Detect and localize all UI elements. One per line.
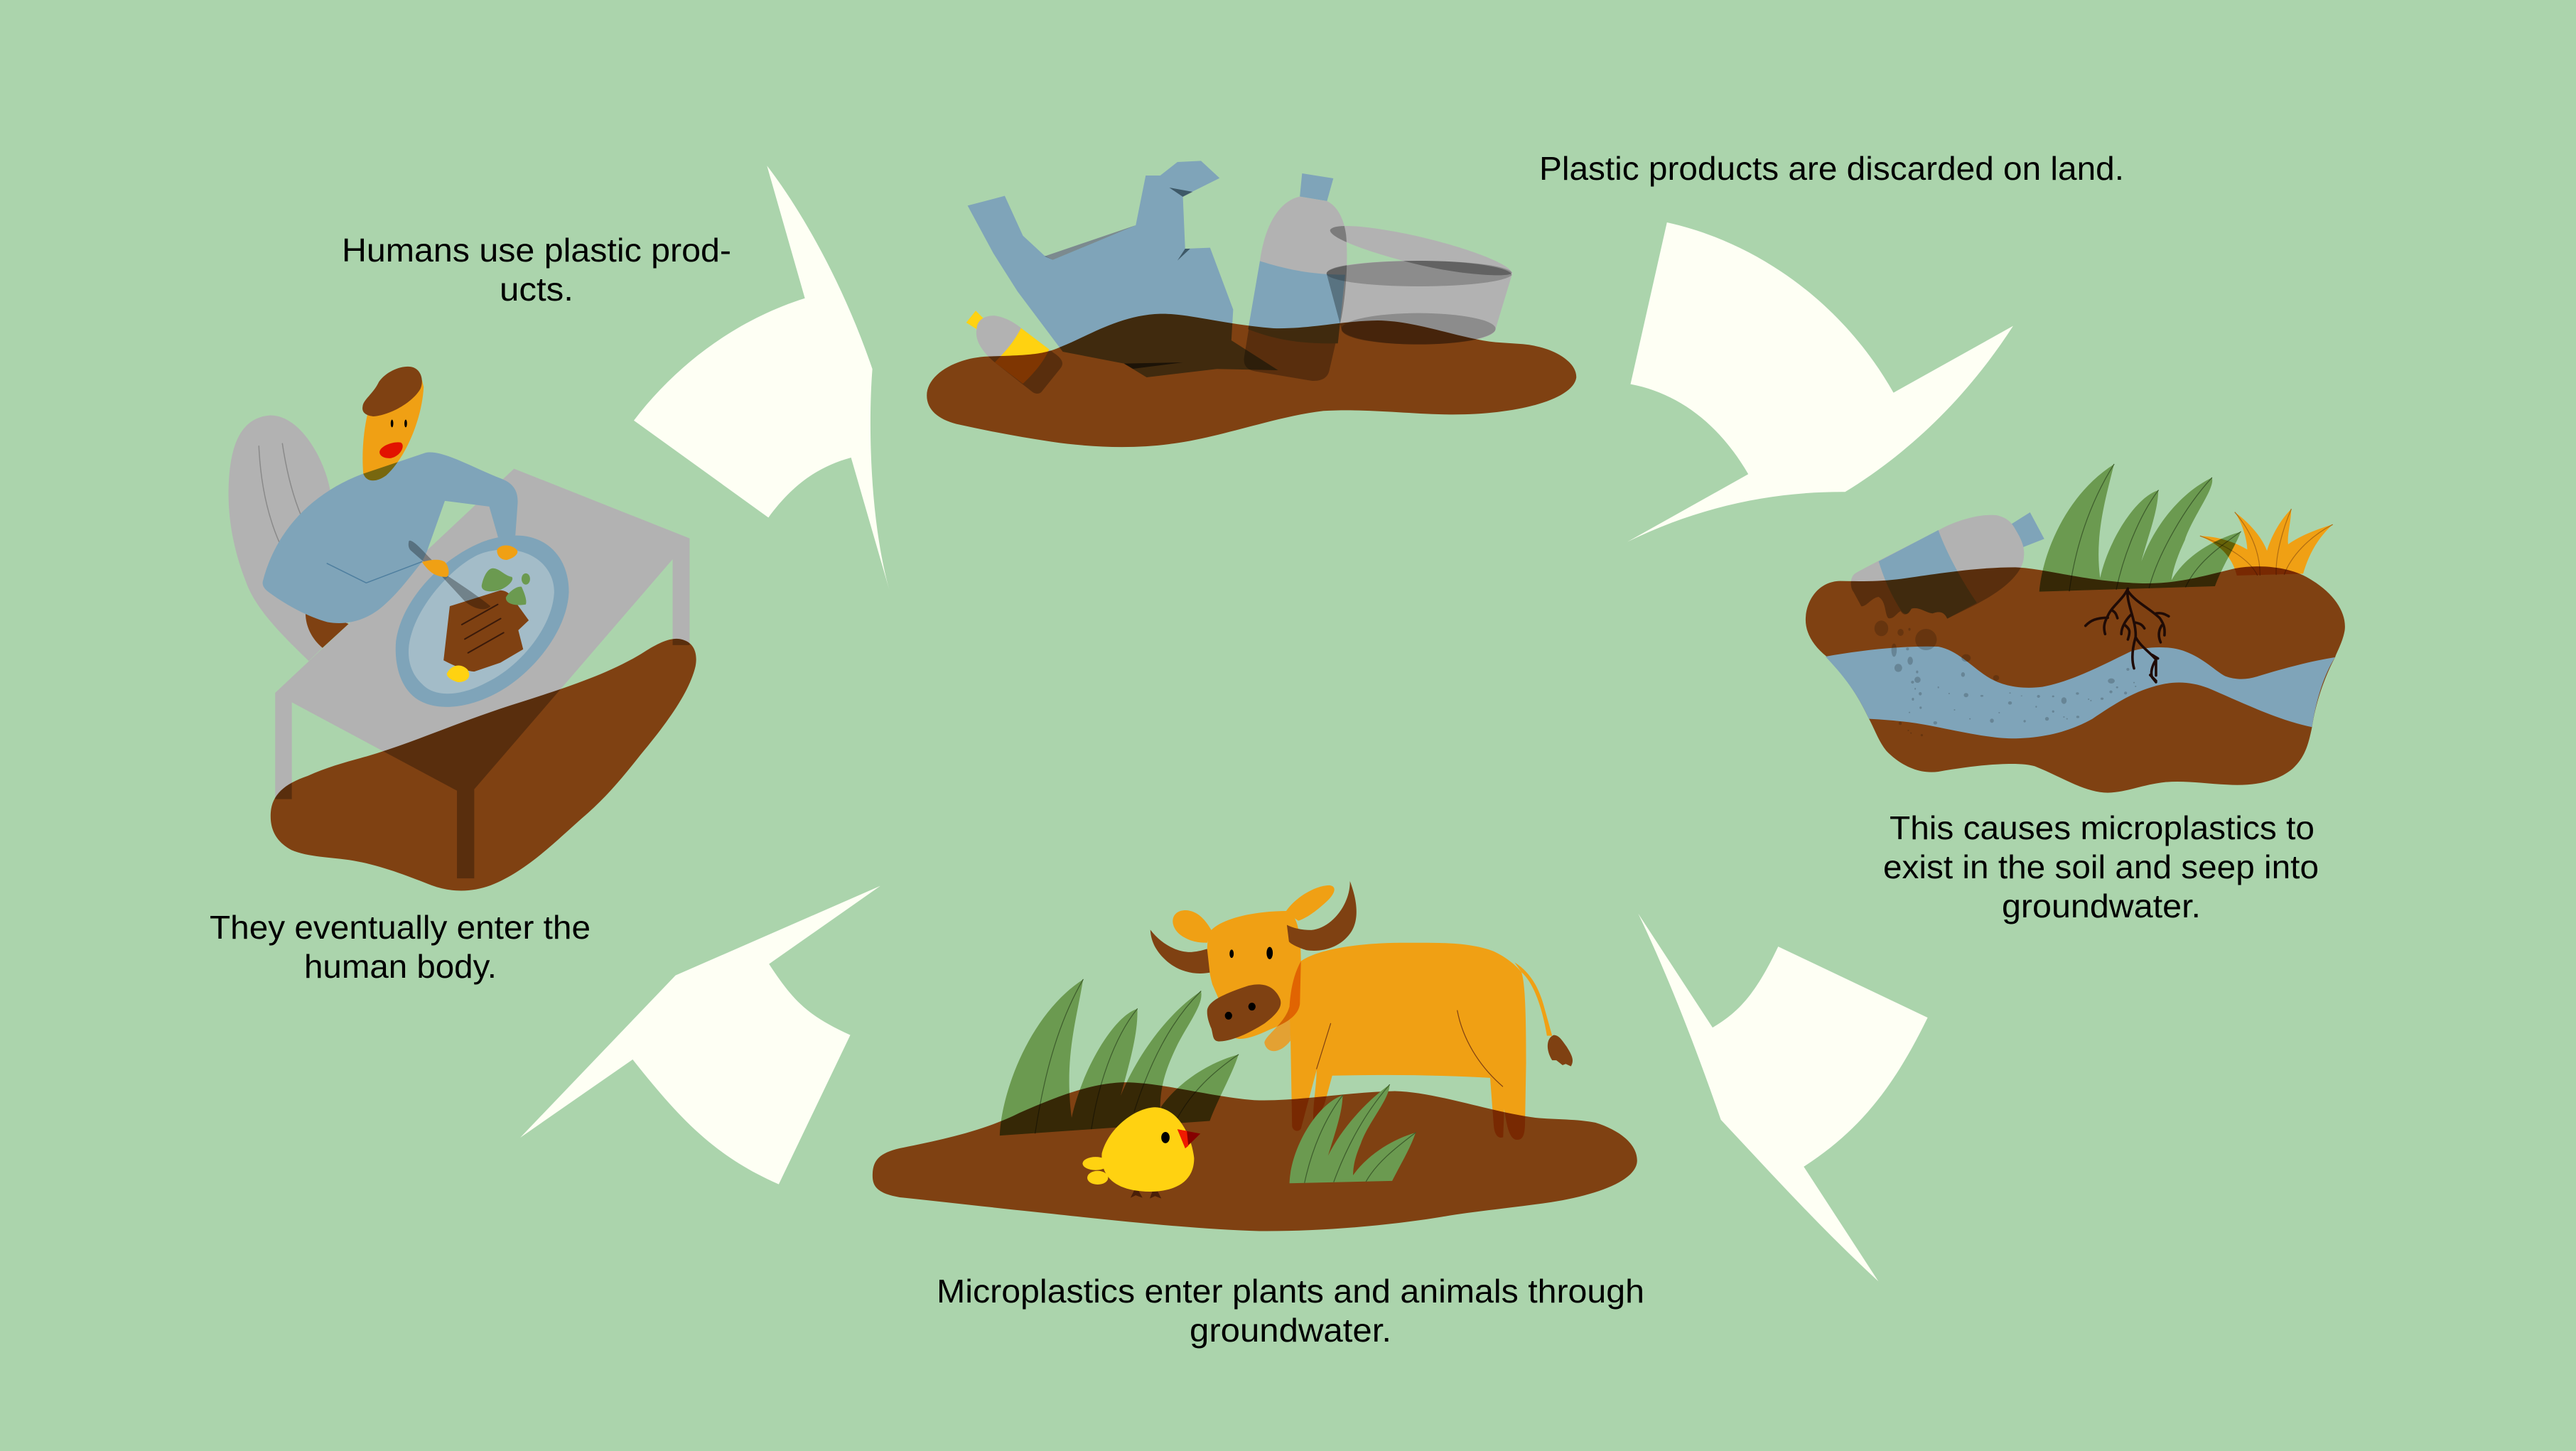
text: step 3 microplastics in soil xyxy=(1883,809,2319,924)
tub base xyxy=(1342,313,1496,345)
arrow: animals to human body xyxy=(520,886,880,1185)
plastic bag xyxy=(968,161,1278,377)
bag folds xyxy=(1045,188,1193,369)
illustration: cow, chick and plants xyxy=(873,881,1637,1231)
text: step 3 microplastics in soil: exist in the soil and seep into xyxy=(1883,848,2319,885)
soil mound xyxy=(927,314,1576,447)
arrow: soil to plants and animals xyxy=(1638,914,1928,1281)
soil cross-section xyxy=(1806,566,2345,793)
illustration: microplastics in soil and groundwater xyxy=(1806,464,2345,793)
lemon xyxy=(447,665,469,682)
cow tail xyxy=(1514,962,1573,1067)
person's trousers xyxy=(306,610,349,648)
arrow: land to soil xyxy=(1627,222,2013,542)
salad greens xyxy=(482,568,530,605)
hands xyxy=(422,546,517,577)
illustration: person eating at a table xyxy=(229,367,696,891)
person's torso and arms xyxy=(263,453,518,623)
plant roots xyxy=(2086,588,2169,682)
shirt fold line xyxy=(327,561,422,583)
text: step 4 plants and animals xyxy=(937,1273,1644,1349)
arrow: humans to discarded on land xyxy=(634,166,890,590)
table xyxy=(275,469,689,878)
small grass xyxy=(1290,1085,1416,1183)
large plastic bottle xyxy=(1244,173,1347,381)
orange plant xyxy=(2200,509,2332,576)
microplastic particles xyxy=(1875,620,2136,736)
lid xyxy=(1330,226,1512,275)
text: step 1 humans use plastic products xyxy=(342,232,731,308)
text: step 1 humans use plastic products: Humans use plastic prod- xyxy=(342,232,731,269)
text: step 4 plants and animals: Microplastics enter plants and animals through xyxy=(937,1273,1644,1310)
plastic tub with lid xyxy=(1327,226,1512,345)
text: step 5 human body: They eventually enter the xyxy=(210,909,591,946)
cow dewlap xyxy=(1264,1006,1290,1051)
tall grass xyxy=(1000,979,1239,1136)
steak xyxy=(443,590,529,671)
text: step 2 discarded on land: Plastic products are discarded on land. xyxy=(1539,150,2124,187)
small grass veins xyxy=(1305,1085,1416,1182)
head xyxy=(362,380,424,480)
text: step 4 plants and animals: groundwater. xyxy=(1190,1312,1391,1349)
yellow chick xyxy=(1082,1107,1200,1199)
soil mound xyxy=(271,639,696,891)
plastic bottle half buried xyxy=(1851,512,2044,619)
text: step 5 human body xyxy=(210,909,591,985)
knife xyxy=(409,541,490,609)
mouth xyxy=(379,442,403,458)
chair xyxy=(229,416,377,661)
text: step 3 microplastics in soil: This causes microplastics to xyxy=(1890,809,2314,846)
tub body xyxy=(1327,261,1512,345)
text: step 5 human body: human body. xyxy=(304,948,497,985)
illustration: plastic waste on land xyxy=(927,161,1576,447)
hair xyxy=(362,367,422,416)
plate xyxy=(396,536,569,707)
groundwater band xyxy=(1826,647,2335,738)
text: step 3 microplastics in soil: groundwater. xyxy=(2002,888,2201,924)
cow body xyxy=(1289,943,1526,1140)
cow head xyxy=(1150,881,1357,1042)
tub rim xyxy=(1327,261,1512,286)
small yellow bottle xyxy=(966,311,1062,394)
text: step 1 humans use plastic products: ucts. xyxy=(500,271,573,308)
green grass xyxy=(2039,464,2241,592)
eyes xyxy=(391,419,407,427)
soil mound xyxy=(873,1082,1637,1231)
